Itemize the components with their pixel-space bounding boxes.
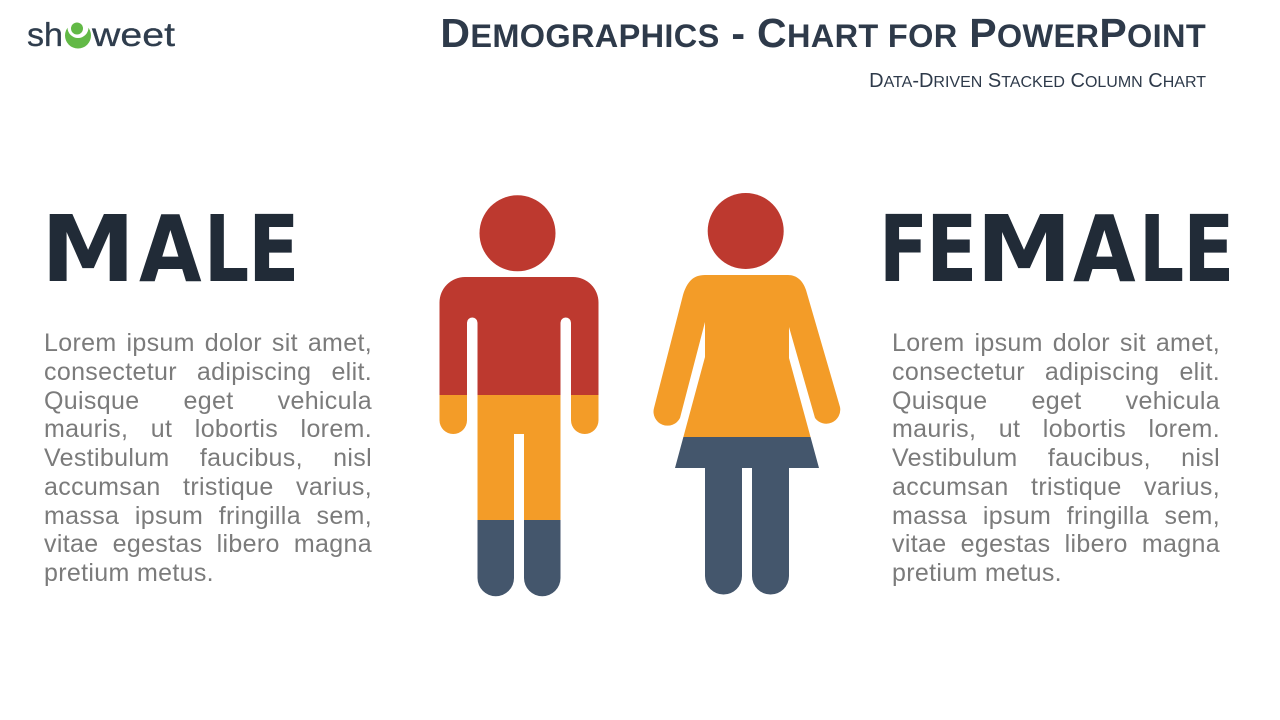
- text block: male description: [44, 329, 372, 587]
- heading: female: A: [1073, 196, 1136, 303]
- text block: female description: Quisque eget vehicula: [892, 386, 1220, 414]
- heading: female: E: [926, 196, 978, 303]
- text block: female description: vitae egestas libero magna: [892, 530, 1220, 558]
- heading: female: [878, 196, 1235, 303]
- text block: female description: Vestibulum faucibus, nisl: [892, 444, 1220, 472]
- text block: female description: massa ipsum fringilla sem,: [892, 502, 1220, 530]
- text block: female description: Lorem ipsum dolor sit amet,: [892, 329, 1220, 357]
- text block: male description: Quisque eget vehicula: [44, 386, 372, 414]
- icon: female figure stacked chart: [654, 193, 840, 594]
- heading: female: L: [1138, 196, 1184, 303]
- text block: male description: Lorem ipsum dolor sit amet,: [44, 329, 372, 357]
- heading: male: E: [248, 196, 300, 303]
- heading: female: F: [878, 196, 928, 303]
- text block: male description: mauris, ut lobortis lorem.: [44, 415, 372, 443]
- text block: female description: mauris, ut lobortis lorem.: [892, 415, 1220, 443]
- text block: male description: consectetur adipiscing elit.: [44, 358, 372, 386]
- heading: male: A: [139, 196, 202, 303]
- text block: female description: accumsan tristique varius,: [892, 473, 1220, 501]
- male body segments: [440, 277, 598, 596]
- heading: male: M: [41, 196, 135, 303]
- heading: female: M: [976, 196, 1072, 303]
- text block: female description: consectetur adipiscing elit.: [892, 358, 1220, 386]
- logo: showeet: [27, 16, 175, 53]
- heading: male: [41, 196, 300, 303]
- heading: female: E: [1183, 196, 1235, 303]
- text block: female description: pretium metus.: [892, 559, 1062, 587]
- title: DEMOGRAPHICS - CHART FOR POWERPOINT: [440, 10, 1206, 56]
- heading: male: L: [204, 196, 249, 303]
- text block: male description: pretium metus.: [44, 559, 214, 587]
- icon: male figure stacked chart: [440, 195, 598, 596]
- text block: male description: Vestibulum faucibus, nisl: [44, 444, 372, 472]
- male head: [480, 195, 556, 271]
- text block: female description: [892, 329, 1220, 587]
- female head: [708, 193, 784, 269]
- text block: male description: massa ipsum fringilla sem,: [44, 502, 372, 530]
- female body segments: [654, 275, 840, 594]
- logo: showeet: sh: [27, 16, 63, 53]
- text block: male description: vitae egestas libero magna: [44, 530, 372, 558]
- text block: male description: accumsan tristique varius,: [44, 473, 372, 501]
- logo: showeet: weet: [91, 16, 175, 53]
- subtitle: DATA-DRIVEN STACKED COLUMN CHART: [869, 70, 1206, 92]
